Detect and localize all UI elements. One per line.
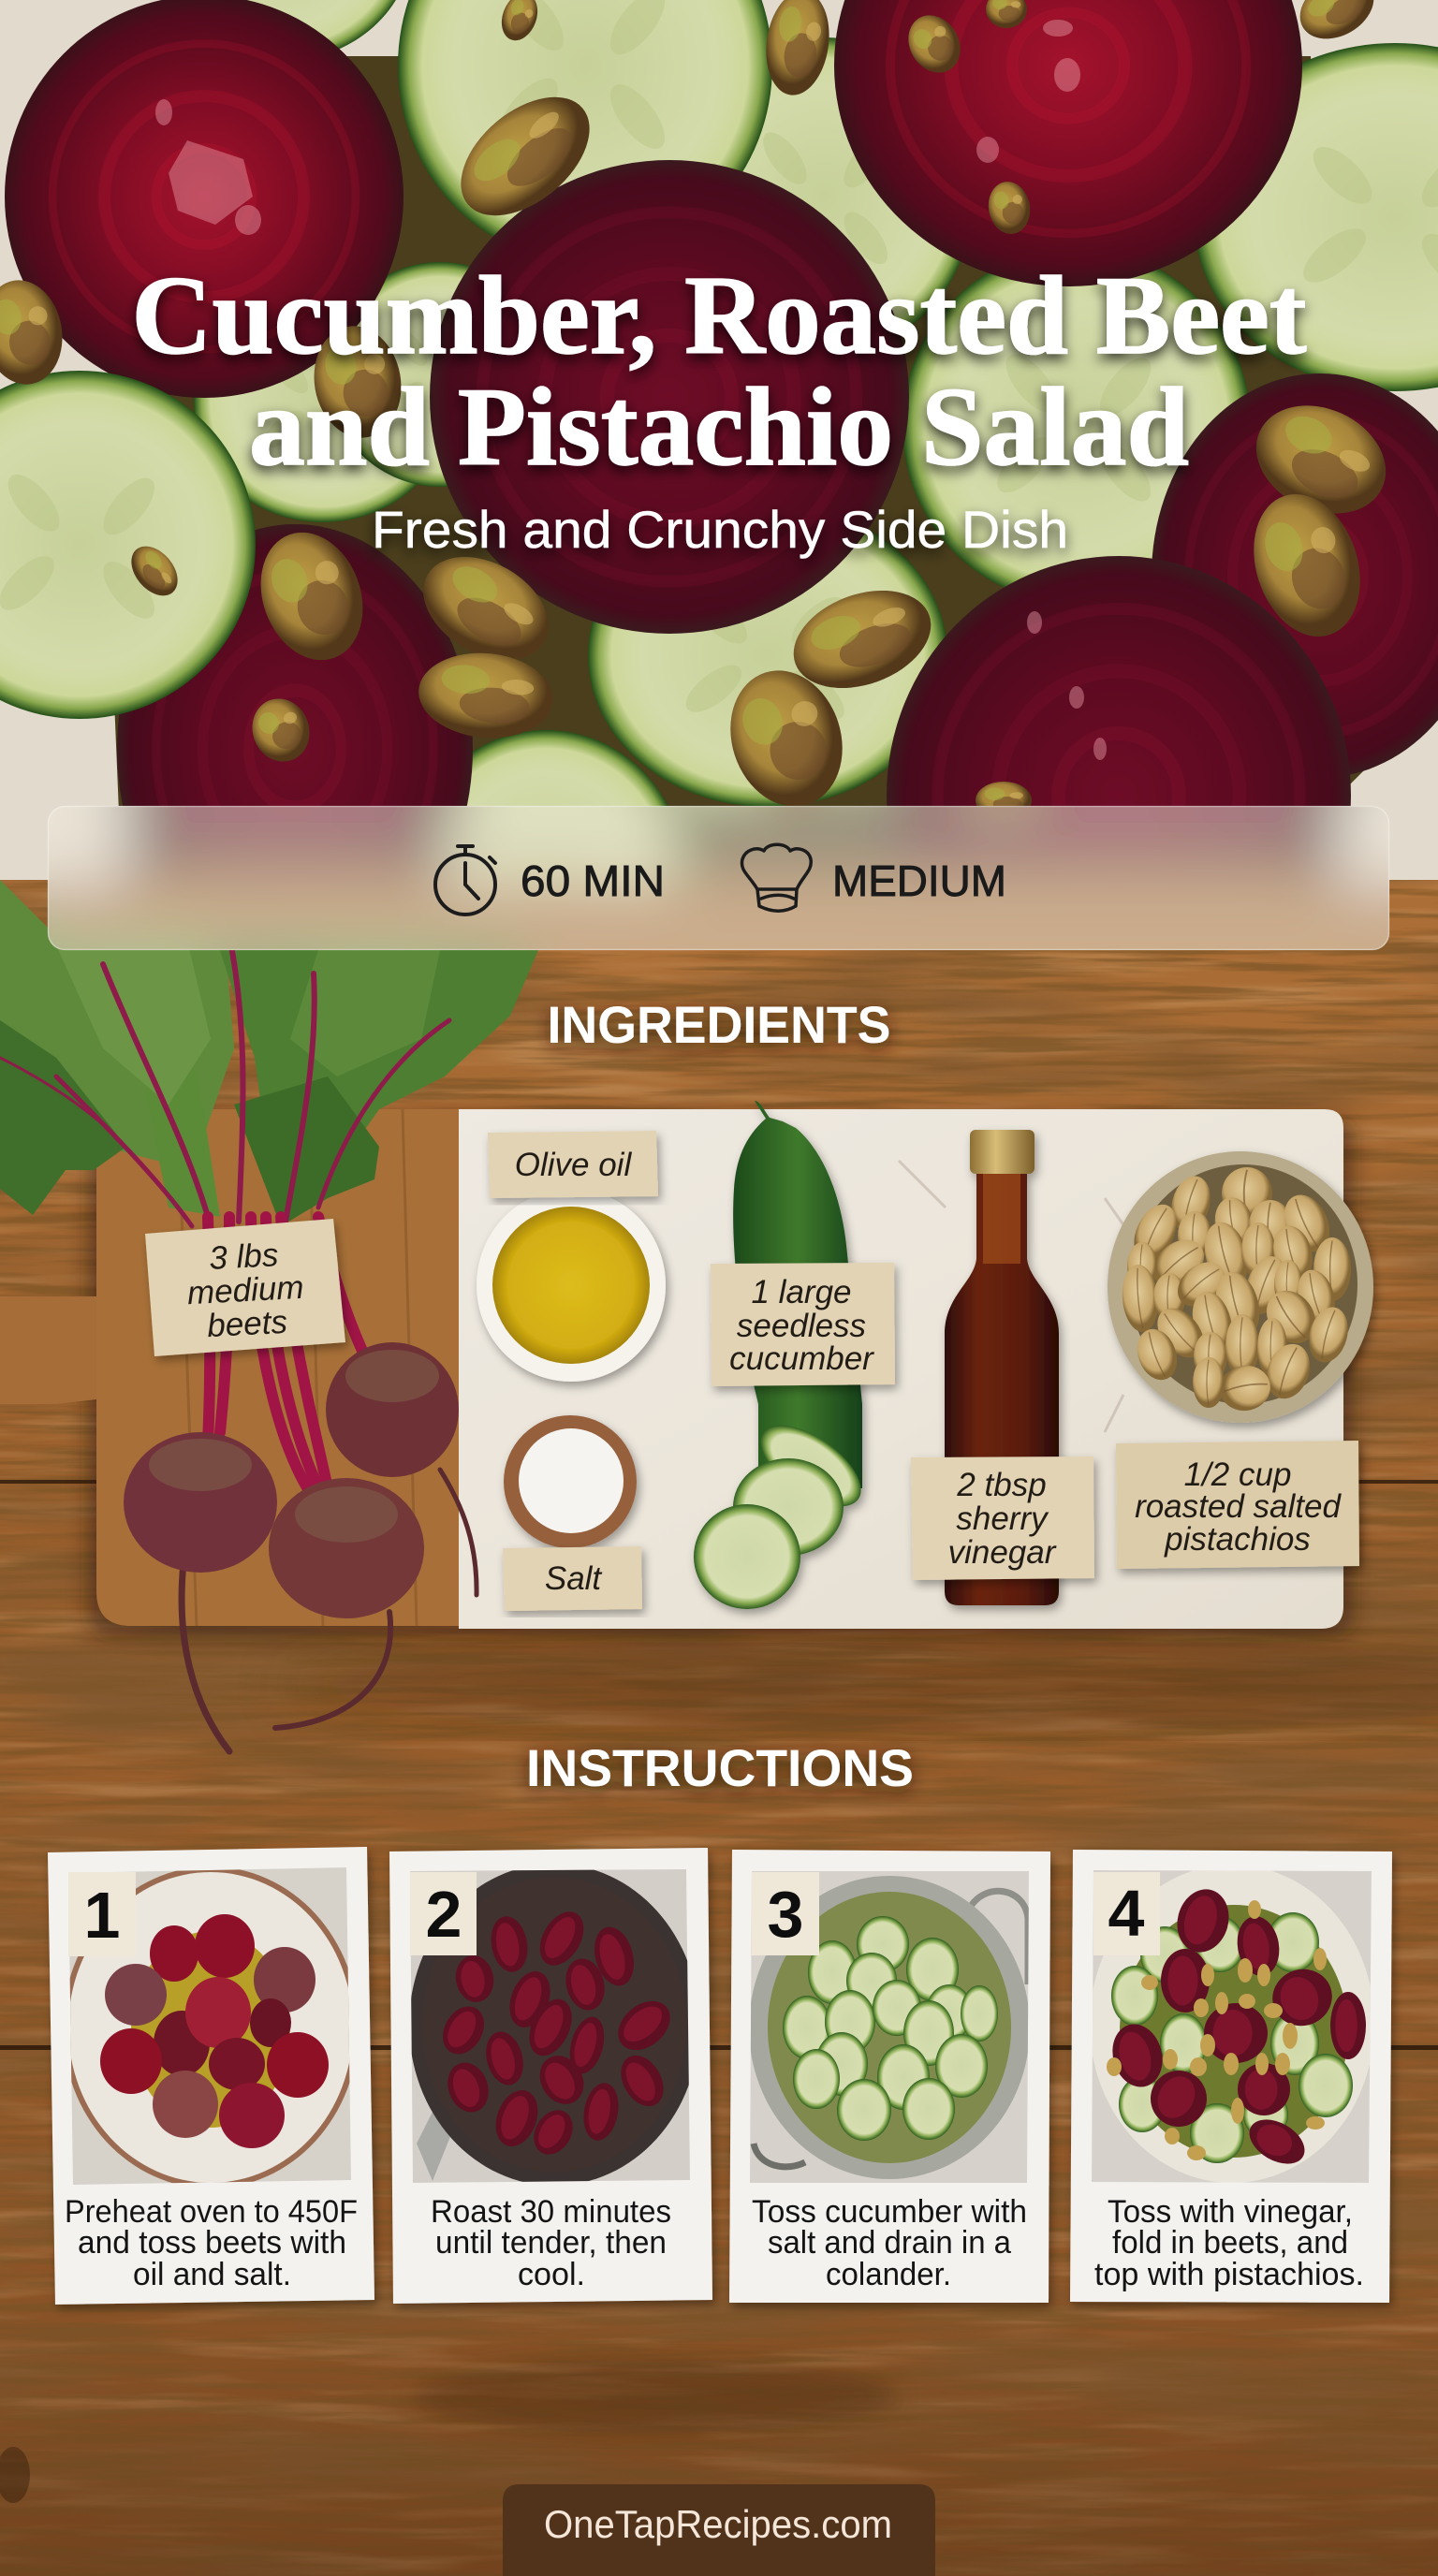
subtitle: Fresh and Crunchy Side Dish — [372, 500, 1068, 559]
beet slices — [5, 0, 1438, 923]
number badge 1: 1 — [84, 1879, 120, 1952]
left cucumber on top — [0, 371, 256, 719]
step 4 caption: top with pistachios. — [1094, 2257, 1364, 2292]
pistachios — [0, 0, 1403, 821]
step card 1 — [48, 1847, 374, 2305]
step card 2 — [389, 1848, 712, 2304]
marble board — [459, 1109, 1343, 1629]
ingredient boards — [0, 1109, 1353, 1635]
label: cucumber: cucumber — [729, 1340, 874, 1377]
step 3 photo: cucumber in colander — [744, 1863, 1034, 2190]
number badge 2: 2 — [426, 1878, 462, 1951]
step 1 caption: oil and salt. — [133, 2257, 291, 2292]
background cucumber slices — [146, 0, 1438, 1011]
heading: ingredients: INGREDIENTS — [547, 995, 891, 1054]
step 3 caption — [752, 2194, 1027, 2292]
difficulty label: MEDIUM — [832, 856, 1006, 905]
step 2 photo: roasted beets in pan — [403, 1863, 702, 2190]
number badge 4 — [1093, 1872, 1160, 1955]
step 4 photo: finished salad — [1086, 1863, 1376, 2190]
step 1 caption: and toss beets with — [78, 2225, 346, 2261]
hero photo: salad close-up — [0, 0, 1438, 925]
ingredient: sherry vinegar bottle — [945, 1130, 1059, 1605]
step 1 photo: beets tossed in oil — [69, 1867, 351, 2185]
step 1 caption: Preheat oven to 450F — [65, 2194, 358, 2230]
label: pistachios: pistachios — [1164, 1521, 1311, 1558]
ingredient: pistachio bowl — [1108, 1151, 1373, 1423]
step 3 caption: Toss cucumber with — [752, 2194, 1027, 2230]
icon: stopwatch — [435, 846, 495, 915]
number badge 4: 4 — [1108, 1877, 1145, 1950]
step card 3 — [729, 1850, 1050, 2303]
label: beets: medium — [186, 1269, 304, 1311]
frosted glass info bar — [47, 805, 1389, 951]
wooden cutting board — [0, 1109, 463, 1626]
step 2 caption: until tender, then — [435, 2225, 667, 2261]
number badge 1 — [68, 1872, 136, 1956]
step 2 caption — [431, 2194, 671, 2292]
label: beets: 3 lbs — [208, 1237, 279, 1277]
label: olive oil: Olive oil — [515, 1147, 632, 1183]
ingredient: beets with stems — [124, 1217, 477, 1751]
label: sherry vinegar: 2 tbsp — [956, 1467, 1047, 1503]
footer badge: OneTapRecipes.com — [544, 2502, 892, 2546]
step 1 caption — [65, 2194, 358, 2292]
heading: instructions: INSTRUCTIONS — [526, 1738, 914, 1797]
beet greens and stems — [0, 880, 538, 1226]
number badge 3 — [752, 1872, 819, 1955]
step 2 caption: cool. — [518, 2257, 585, 2292]
ingredient: olive oil bowl — [477, 1189, 666, 1382]
label: pistachios: 1/2 cup — [1184, 1456, 1291, 1493]
title: and Pistachio Salad — [249, 364, 1189, 489]
label: beets: beets — [206, 1304, 288, 1344]
step card 4 — [1070, 1850, 1392, 2303]
step 4 caption: Toss with vinegar, — [1108, 2194, 1353, 2230]
step 3 caption: colander. — [826, 2257, 951, 2292]
label: salt — [503, 1546, 642, 1611]
title: Cucumber, Roasted Beet — [131, 253, 1307, 377]
label: salt: Salt — [545, 1560, 602, 1597]
footer badge — [503, 2484, 935, 2576]
step 2 caption: Roast 30 minutes — [431, 2194, 671, 2230]
label: cucumber — [711, 1263, 895, 1386]
title — [131, 253, 1307, 489]
label: pistachios — [1116, 1441, 1359, 1569]
ingredient: salt bowl — [504, 1415, 637, 1548]
step 4 caption: fold in beets, and — [1112, 2225, 1348, 2261]
label: pistachios: roasted salted — [1135, 1488, 1342, 1525]
step 3 caption: salt and drain in a — [768, 2225, 1011, 2261]
label: cucumber: seedless — [737, 1308, 866, 1344]
label: beets — [145, 1219, 345, 1356]
label: sherry vinegar: sherry — [956, 1500, 1049, 1537]
number badge 3: 3 — [768, 1878, 803, 1951]
step 4 caption — [1094, 2194, 1364, 2292]
label: cucumber: 1 large — [751, 1274, 852, 1310]
label: sherry vinegar: vinegar — [948, 1534, 1057, 1571]
glossy highlights on beet — [155, 20, 1107, 760]
time label: 60 MIN — [521, 856, 665, 905]
label: olive oil — [488, 1131, 658, 1198]
ingredient: cucumber — [694, 1101, 874, 1609]
label: sherry vinegar — [911, 1456, 1094, 1580]
icon: chef hat — [741, 844, 811, 911]
number badge 2 — [410, 1872, 477, 1955]
